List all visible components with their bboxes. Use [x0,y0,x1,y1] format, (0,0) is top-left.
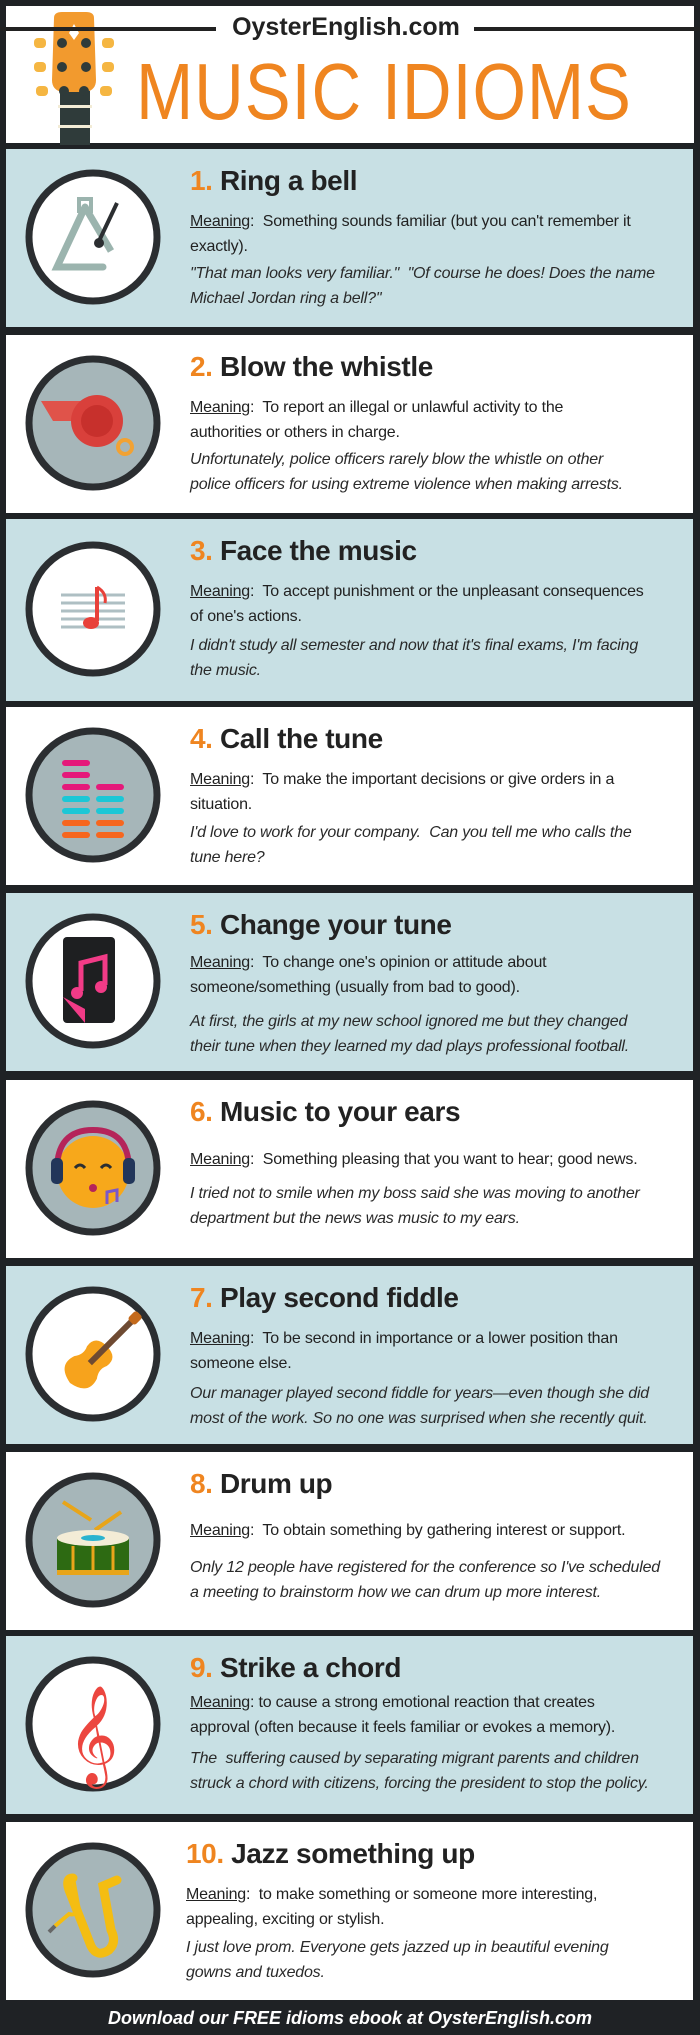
meaning: authorities or others in charge. [190,424,400,441]
example: tune here? [190,849,265,866]
panel: 1 ring a bell [6,149,693,327]
icon: triangle [26,170,160,304]
panel: 10 jazz something up [6,1822,693,2000]
example [190,1750,649,1792]
example: The suffering caused by separating migrant parents and children [190,1750,639,1767]
example: their tune when they learned my dad plays professional football. [190,1038,629,1055]
example [190,1385,650,1427]
icon: emoji headphones [26,1100,160,1236]
panel: 5 change your tune [6,893,693,1071]
meaning: Meaning: Something sounds familiar (but you can't remember it [190,213,631,230]
heading: 3. Face the music [190,535,417,566]
example [186,1935,609,1985]
example: gowns and tuxedos. [186,1964,325,1981]
meaning: situation. [190,796,252,813]
panel: 4 call the tune [6,707,693,885]
example [190,824,632,866]
icon: sheet music [26,542,160,676]
panel: 3 face the music [6,519,693,701]
example: "That man looks very familiar." "Of course he does! Does the name [190,265,655,282]
site name [6,13,694,41]
meaning: Meaning: to cause a strong emotional reaction that creates [190,1694,595,1711]
meaning: exactly). [190,238,248,255]
icon: violin [26,1286,160,1422]
heading: 7. Play second fiddle [190,1282,459,1313]
meaning: Meaning: To change one's opinion or attitude about [190,954,546,971]
panel: 7 play second fiddle [6,1266,693,1444]
example [190,1185,640,1227]
title: MUSIC IDIOMS [136,47,632,136]
example: At first, the girls at my new school ignored me but they changed [190,1013,627,1030]
example: police officers for using extreme violence when making arrests. [190,476,623,493]
example: I just love prom. Everyone gets jazzed up in beautiful evening [186,1939,609,1956]
heading: 9. Strike a chord [190,1652,401,1683]
example [190,451,623,493]
example: I didn't study all semester and now that it's final exams, I'm facing [190,637,638,654]
meaning [190,771,614,813]
panel: 6 music to your ears [6,1080,693,1258]
example [190,1559,661,1601]
meaning: Meaning: To obtain something by gathering interest or support. [190,1522,625,1539]
meaning [190,954,546,996]
site name: OysterEnglish.com [232,13,460,41]
example: Only 12 people have registered for the conference so I've scheduled [190,1559,660,1576]
heading: 4. Call the tune [190,723,383,754]
example [190,637,638,679]
heading: 6. Music to your ears [190,1096,460,1127]
icon: whistle [26,356,160,490]
icon: phone music [26,914,160,1048]
meaning: someone else. [190,1355,291,1372]
icon: guitar headstock [34,12,114,145]
example [190,265,655,307]
example: Michael Jordan ring a bell?" [190,290,381,307]
meaning: Meaning: Something pleasing that you want to hear; good news. [190,1151,637,1168]
example: I tried not to smile when my boss said she was moving to another [190,1185,640,1202]
footer: Download our FREE idioms ebook at OysterEnglish.com [108,2008,592,2028]
example [189,1013,629,1055]
heading: 1. Ring a bell [190,165,357,196]
icon: treble clef [26,1656,160,1792]
meaning: someone/something (usually from bad to good). [190,979,520,996]
meaning: appealing, exciting or stylish. [186,1911,384,1928]
meaning: Meaning: To report an illegal or unlawful activity to the [190,399,563,416]
example: I'd love to work for your company. Can you tell me who calls the [190,824,632,841]
example: a meeting to brainstorm how we can drum up more interest. [190,1584,601,1601]
meaning [190,1694,615,1736]
example: Our manager played second fiddle for years—even though she did [190,1385,649,1402]
meaning: Meaning: To accept punishment or the unpleasant consequences [190,583,644,600]
meaning [190,583,644,625]
meaning [190,1330,618,1372]
header [6,6,694,143]
meaning [190,213,631,255]
example: struck a chord with citizens, forcing the president to stop the policy. [190,1775,649,1792]
example: department but the news was music to my ears. [190,1210,520,1227]
panel: 8 drum up [6,1452,693,1630]
meaning [190,399,563,441]
meaning: of one's actions. [190,608,302,625]
example: the music. [190,662,261,679]
icon: drum [26,1472,160,1608]
example: Unfortunately, police officers rarely blow the whistle on other [190,451,603,468]
heading: 8. Drum up [190,1468,332,1499]
heading: 5. Change your tune [190,909,452,940]
icon: treble clef: 𝄞 [68,1685,118,1789]
panel: 9 strike a chord [6,1636,693,1814]
meaning: Meaning: To be second in importance or a lower position than [190,1330,618,1347]
heading: 2. Blow the whistle [190,351,433,382]
heading: 10. Jazz something up [186,1838,475,1869]
panel: 2 blow the whistle [6,335,693,513]
meaning [186,1882,597,1932]
icon: saxophone [26,1842,160,1978]
meaning: approval (often because it feels familiar or evokes a memory). [190,1719,615,1736]
example: most of the work. So no one was surprised when she recently quit. [190,1410,647,1427]
meaning: Meaning: To make the important decisions or give orders in a [190,771,614,788]
icon: equalizer [26,728,160,862]
meaning: Meaning: to make something or someone more interesting, [186,1886,597,1903]
